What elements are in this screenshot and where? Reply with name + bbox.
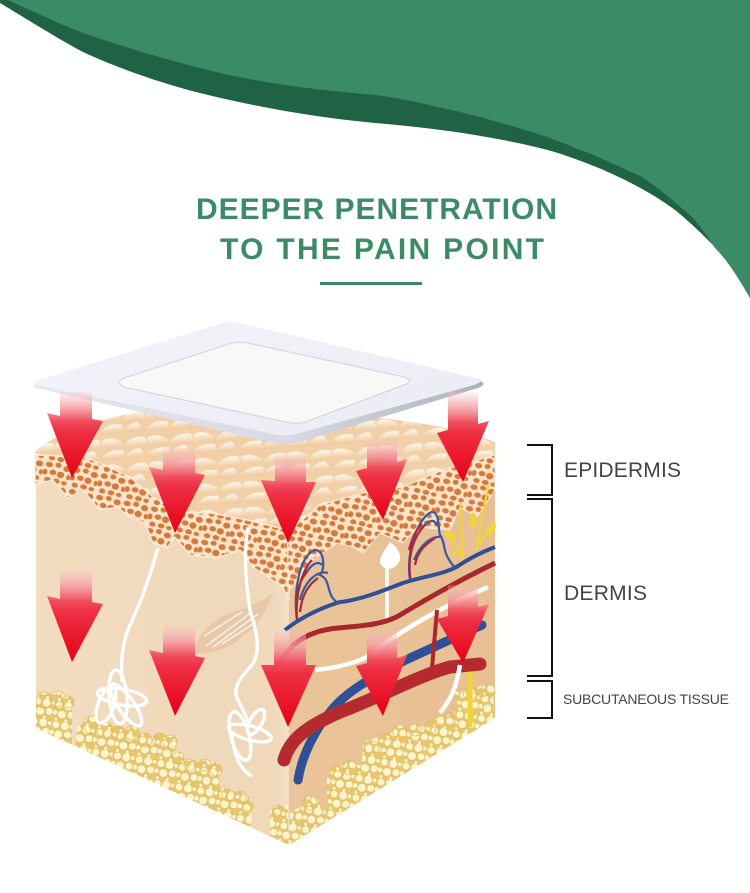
header: green curved banner	[0, 0, 750, 298]
fat layer	[36, 685, 495, 846]
arrow 2	[149, 448, 205, 533]
bracket: dermis	[527, 499, 552, 676]
arrow 3	[261, 455, 316, 543]
arrow 5	[437, 392, 489, 482]
patch edge	[34, 324, 484, 444]
sensory nerve, yellow	[444, 485, 496, 727]
red artery, upper	[280, 563, 495, 662]
arrow 6	[47, 570, 103, 662]
title: TO THE PAIN POINT	[220, 233, 544, 266]
arrow 1	[47, 392, 103, 478]
bracket: epidermis	[527, 445, 552, 495]
blue vein, upper	[285, 547, 495, 630]
bracket: subcutaneous tissue	[527, 681, 552, 718]
top skin surface	[35, 405, 495, 532]
white nerve	[315, 587, 488, 670]
red artery connector	[432, 610, 437, 668]
medical patch	[34, 322, 484, 444]
title: DEEPER PENETRATION	[196, 193, 557, 226]
label: epidermis: EPIDERMIS	[564, 459, 681, 482]
white nerve, lower	[440, 665, 460, 713]
epidermis cell layer, right	[288, 455, 495, 592]
small blue and red capillaries, right	[409, 512, 455, 582]
hair shaft with white bulb	[380, 542, 400, 622]
red artery, lower	[284, 664, 480, 760]
arrow 10	[437, 585, 489, 663]
skin cube diagram	[35, 405, 496, 846]
title underline	[320, 282, 422, 285]
label: subcutaneous tissue: SUBCUTANEOUS TISSUE	[563, 691, 729, 707]
epidermis cell layer, left	[35, 455, 289, 600]
patch inner pad	[120, 342, 409, 423]
patch body	[34, 322, 481, 435]
arrow 4	[356, 440, 407, 520]
title	[196, 193, 557, 266]
arrows pointing into skin	[47, 392, 489, 727]
blue vein, lower	[298, 625, 482, 780]
hair follicle nerve, left	[92, 548, 158, 730]
arrow 9	[356, 630, 407, 716]
hair follicle nerve, right	[225, 527, 273, 776]
arrow 7	[149, 625, 205, 716]
left face of skin block	[36, 440, 289, 845]
muscle	[193, 593, 273, 654]
right face of skin block	[289, 440, 495, 845]
label: dermis: DERMIS	[564, 582, 647, 605]
small blue and red capillaries, left	[296, 550, 338, 620]
arrow 8	[261, 630, 316, 727]
